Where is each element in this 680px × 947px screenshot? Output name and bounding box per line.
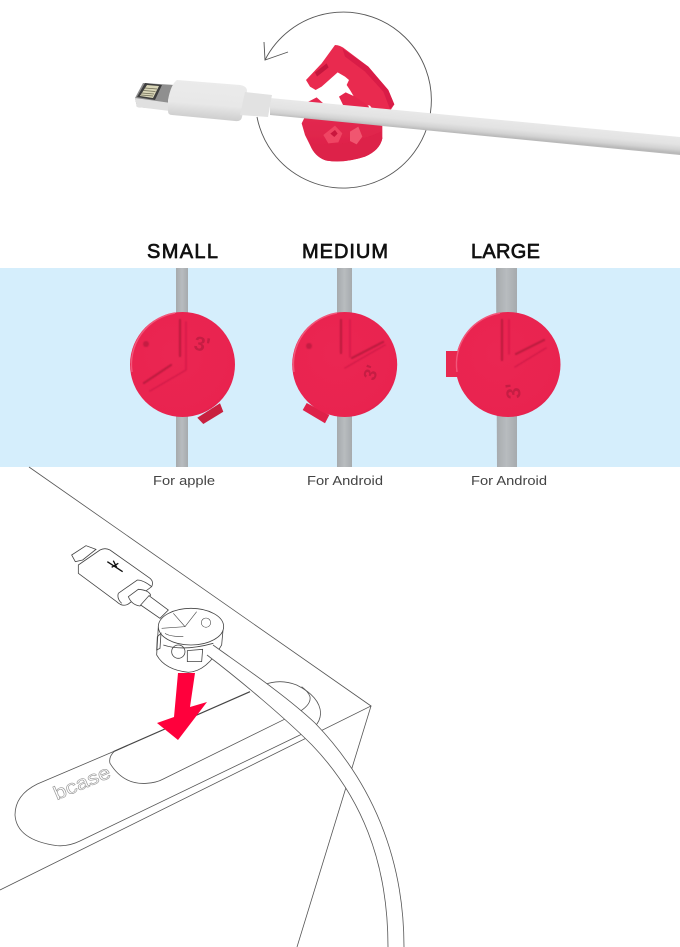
- desk edges: [0, 467, 371, 947]
- large clip size mark: 3': [502, 382, 526, 400]
- medium clip edge highlight: [293, 313, 337, 372]
- rotation diagram: cable and clip: [135, 12, 680, 188]
- bcase logo: bcase: [50, 762, 114, 805]
- strain relief: [240, 92, 272, 117]
- small tab: [197, 403, 223, 424]
- red down arrow: [157, 673, 207, 740]
- lightning plug metal: [135, 83, 175, 111]
- label large: For Android: [471, 473, 547, 488]
- cable neck: [128, 589, 151, 606]
- micro usb tip: [72, 546, 96, 562]
- small clip edge highlight: [131, 313, 175, 372]
- medium clip hands: [306, 320, 385, 368]
- usb plug body: [78, 549, 153, 605]
- lightning cable: [270, 98, 680, 155]
- rotation arrow circle: [257, 12, 431, 188]
- small clip size mark: 3': [192, 333, 212, 357]
- heading large: LARGE: [471, 241, 540, 263]
- usb connector and clip: [72, 546, 224, 672]
- heading small: SMALL: [147, 241, 218, 263]
- long cable: [207, 645, 404, 947]
- large clip edge highlight: [456, 313, 500, 372]
- adhesive pad: [15, 682, 321, 846]
- heading medium: MEDIUM: [302, 241, 388, 263]
- red open clip: [302, 45, 394, 161]
- cable clip body: [157, 627, 223, 672]
- installation diagram: [0, 467, 404, 947]
- lightning connector boot: [168, 80, 247, 121]
- large clip: [446, 312, 560, 417]
- usb symbol: [107, 561, 123, 572]
- small clip hands: [143, 320, 186, 391]
- large clip hands: [502, 320, 546, 367]
- label small: For apple: [153, 473, 215, 488]
- medium clip: [292, 312, 397, 423]
- medium tab: [303, 403, 329, 423]
- medium clip size mark: 3': [359, 363, 383, 383]
- size headings: [147, 241, 540, 263]
- small clip: [130, 312, 235, 424]
- label medium: For Android: [307, 473, 383, 488]
- size comparison band: [0, 268, 680, 467]
- cables behind discs: [176, 268, 517, 467]
- device labels: [153, 473, 547, 488]
- large tab: [446, 351, 458, 377]
